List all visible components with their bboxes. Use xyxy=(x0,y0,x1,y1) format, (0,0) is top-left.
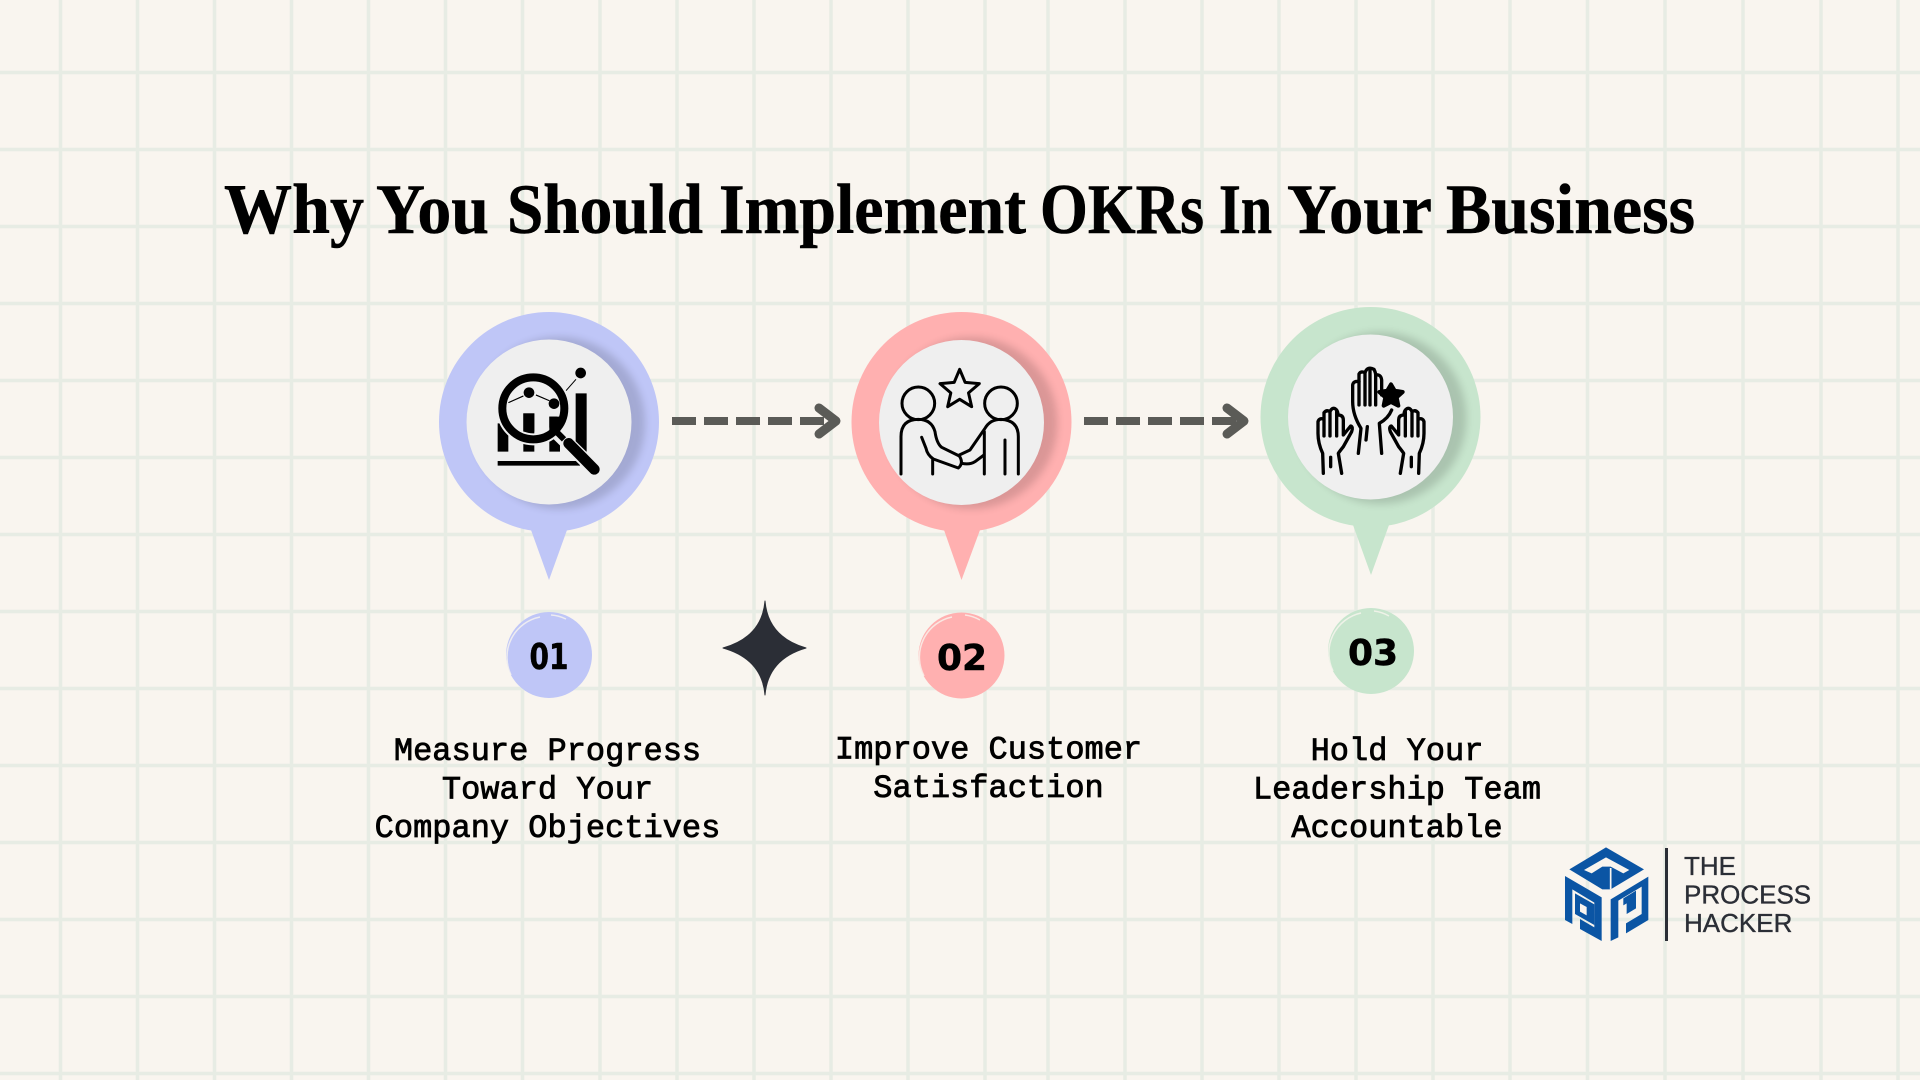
number badge 03: 03 xyxy=(1348,633,1398,674)
icon: magnifier over bar chart xyxy=(498,368,595,470)
panel: step 3 pin xyxy=(1260,307,1480,575)
logo wordmark: HACKER xyxy=(1684,908,1792,938)
title: Your xyxy=(1287,171,1432,249)
title: Business xyxy=(1446,171,1695,249)
text: step 2 description xyxy=(835,732,1142,807)
arrow: step 1 to step 2 xyxy=(672,408,836,434)
text: step 2 description: Improve Customer xyxy=(835,732,1142,768)
text: step 3 description xyxy=(1253,733,1541,847)
title: Should xyxy=(507,171,703,249)
number badge 03 xyxy=(1328,608,1414,694)
text: step 1 description: Toward Your xyxy=(442,772,653,808)
logo wordmark: THE xyxy=(1684,851,1736,881)
arrow: step 2 to step 3 xyxy=(1084,408,1244,434)
number badge 02: 02 xyxy=(937,638,987,679)
text: step 2 description: Satisfaction xyxy=(873,770,1104,807)
logo wordmark xyxy=(1684,851,1811,938)
number badge 02 xyxy=(918,612,1004,698)
text: step 1 description xyxy=(375,733,720,847)
icon: raised hands with star xyxy=(1318,368,1424,473)
number badge 01 xyxy=(506,612,592,698)
text: step 3 description: Hold Your xyxy=(1311,733,1483,770)
title: Why xyxy=(224,171,364,249)
divider xyxy=(1665,848,1668,941)
decorative four-point star xyxy=(723,601,806,695)
text: step 1 description: Measure Progress xyxy=(394,733,701,770)
icon: blue cube mark xyxy=(1565,847,1648,941)
title: Implement xyxy=(719,171,1026,249)
title: OKRs xyxy=(1040,171,1204,249)
logo: The Process Hacker xyxy=(1565,847,1811,941)
number badge 01: 01 xyxy=(530,637,568,678)
text: step 1 description: Company Objectives xyxy=(375,810,720,847)
panel: step 1 pin xyxy=(439,312,659,580)
title xyxy=(224,171,1695,249)
icon: handshake with star xyxy=(901,369,1018,474)
panel: step 2 pin xyxy=(852,312,1072,580)
text: step 3 description: Accountable xyxy=(1291,810,1503,847)
title: You xyxy=(376,171,489,249)
text: step 3 description: Leadership Team xyxy=(1253,772,1541,808)
title: In xyxy=(1219,171,1272,249)
logo wordmark: PROCESS xyxy=(1684,880,1811,910)
